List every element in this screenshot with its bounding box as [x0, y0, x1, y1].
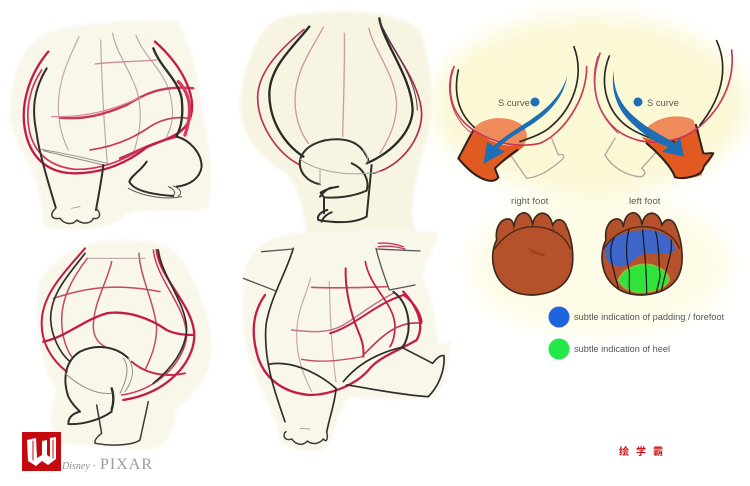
dot	[530, 98, 540, 106]
icon: right foot sole	[493, 213, 573, 295]
icon: blue dot	[548, 306, 570, 328]
footer: Disney Pixar credit: Disney	[61, 461, 90, 472]
red outer contour	[24, 42, 192, 173]
label: S curve: S curve	[647, 97, 679, 108]
red grid lines	[53, 253, 160, 370]
label: right foot: right foot	[511, 196, 549, 207]
padding area	[605, 230, 675, 267]
watermark text: 绘学霸	[619, 445, 670, 458]
construction lines	[58, 33, 173, 163]
arrow: blue S curve	[483, 75, 567, 164]
footer: Disney Pixar credit	[61, 456, 153, 473]
icon: green dot	[548, 338, 570, 360]
heel area	[618, 264, 669, 292]
black outlines	[266, 248, 293, 422]
legend: heel	[548, 338, 670, 360]
toes	[52, 208, 100, 224]
red outer contour	[254, 292, 420, 395]
foot	[65, 347, 128, 424]
arrow: blue S curve	[613, 70, 684, 157]
dot	[634, 98, 642, 106]
foot	[300, 139, 368, 184]
footer: Disney Pixar credit: PIXAR	[100, 456, 153, 473]
icon: left foot sole with padding and heel	[602, 213, 682, 295]
construction lines	[297, 278, 336, 392]
icon: red W logo	[22, 432, 61, 471]
legend marker: S curve left foot	[634, 97, 679, 108]
panel: foot sketch bottom left	[37, 240, 212, 450]
text: heel label: subtle indication of heel	[574, 344, 670, 354]
sole contour lines	[627, 230, 630, 292]
panel: foot sketch top left	[10, 20, 211, 230]
text: padding label: subtle indication of padding / forefoot	[574, 312, 725, 322]
black outlines	[269, 27, 309, 157]
left foot side view	[594, 41, 732, 178]
right foot side view	[449, 47, 587, 181]
legend: padding / forefoot	[548, 306, 725, 328]
construction lines	[295, 27, 397, 153]
label: S curve: S curve	[498, 97, 530, 108]
footer: Disney Pixar credit: ·	[92, 458, 96, 472]
panel: right-side yellow colour study background	[432, 15, 748, 335]
panel: foot sketch top centre	[240, 11, 431, 237]
red grid strokes	[346, 268, 364, 357]
legend marker: S curve right foot	[498, 97, 540, 108]
red contours	[258, 29, 304, 165]
panel: S curve colour study	[449, 41, 732, 181]
label: left foot: left foot	[629, 196, 661, 207]
red cross-contours	[60, 88, 193, 118]
black outline	[34, 68, 56, 207]
toes	[284, 432, 327, 444]
black lines	[51, 253, 85, 362]
red outer contours	[42, 248, 85, 372]
panel: foot sketch bottom centre	[243, 229, 452, 451]
